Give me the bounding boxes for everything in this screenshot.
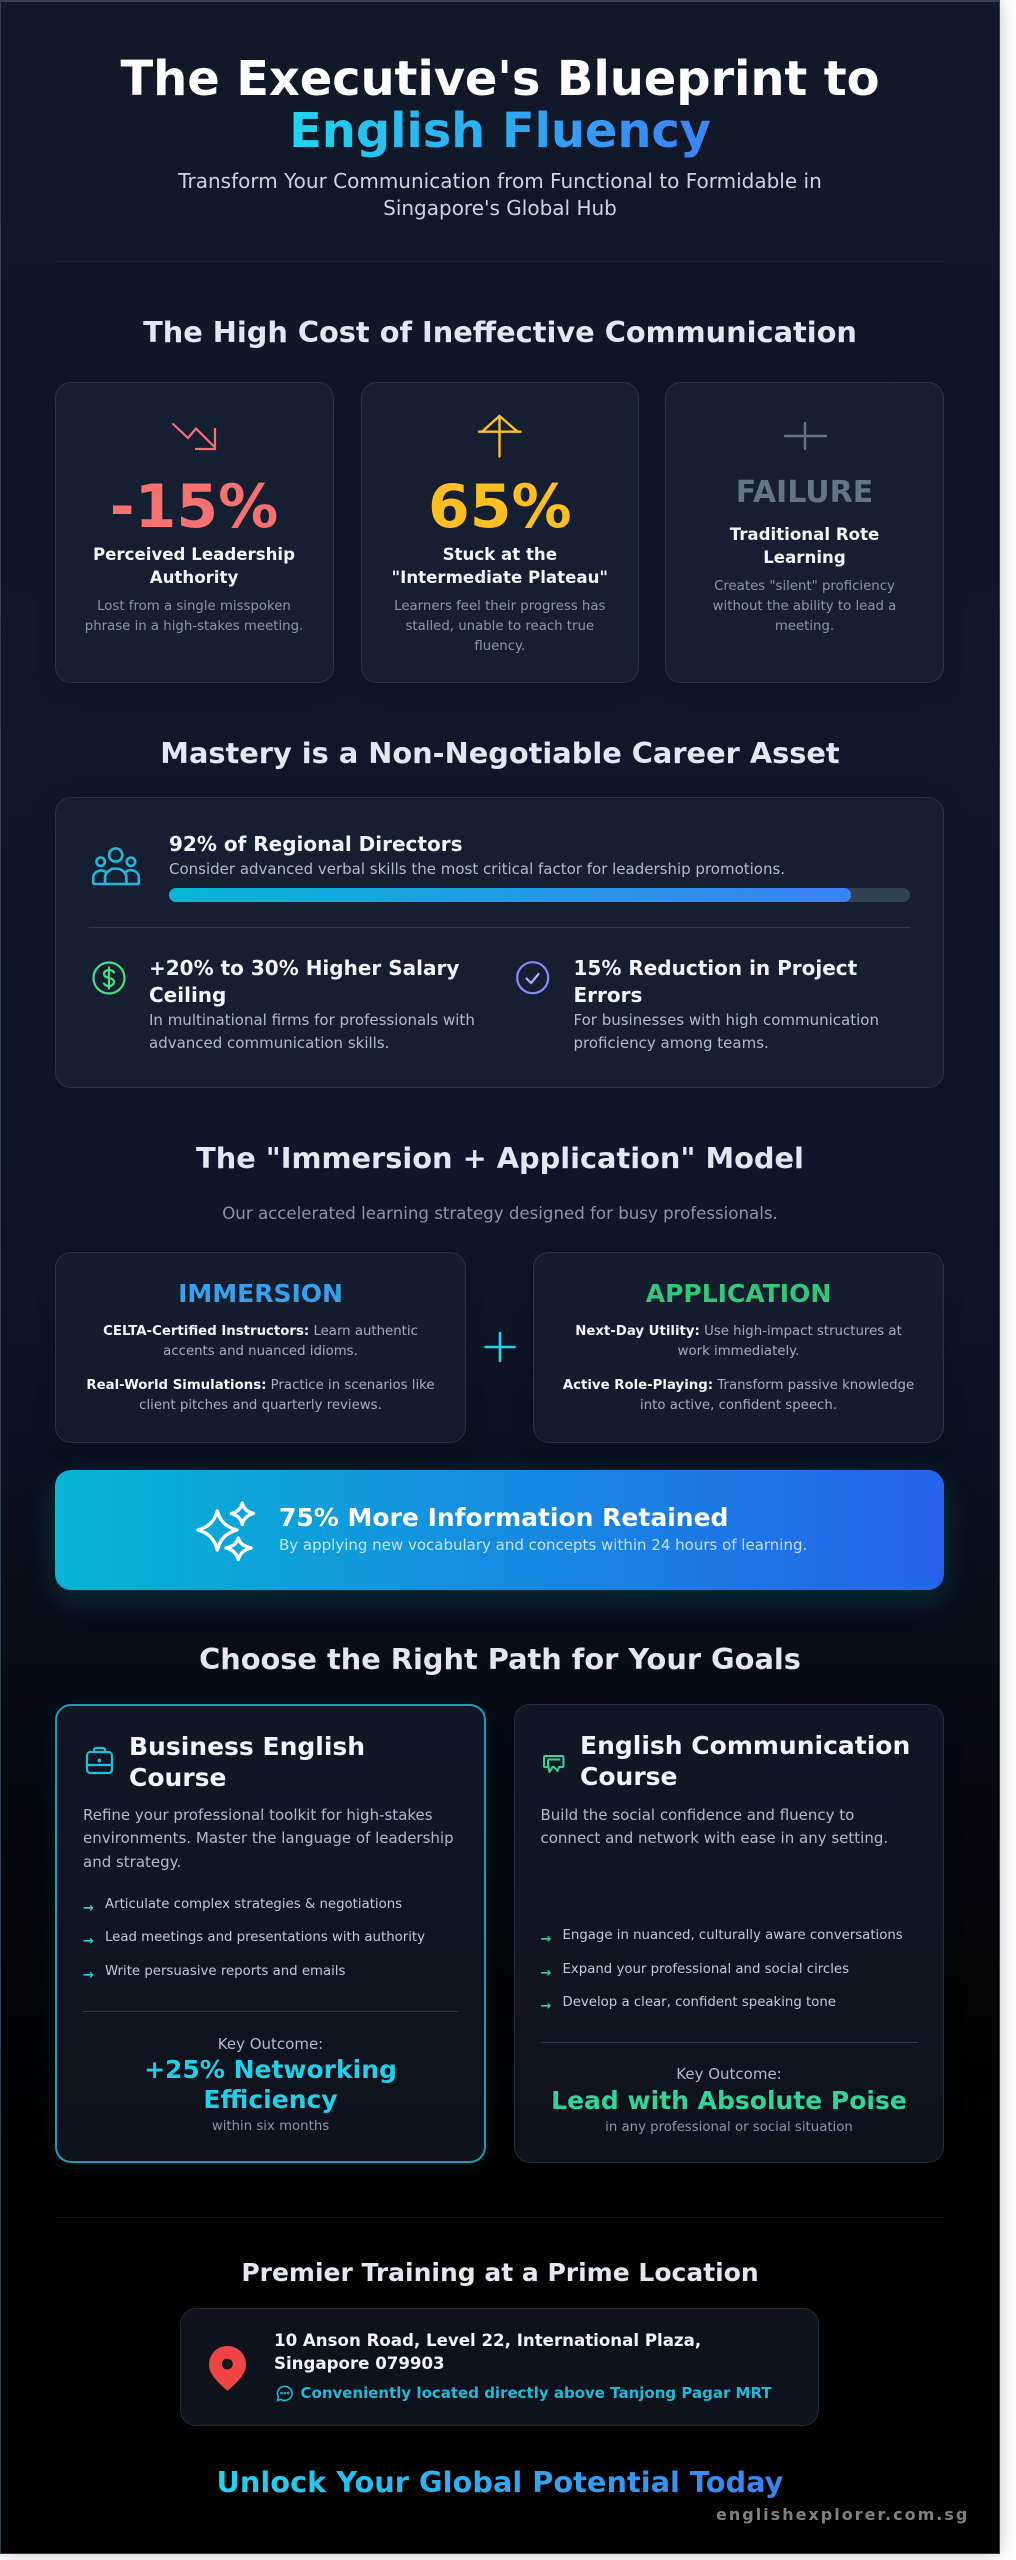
course title: English Communication: [580, 1730, 910, 1760]
stat description: Learners feel their progress has: [394, 599, 605, 614]
stat description: fluency.: [474, 639, 525, 654]
bullet list: [83, 1896, 425, 1982]
stat description: stalled, unable to reach true: [405, 619, 594, 634]
key outcome label: Key Outcome:: [676, 2065, 782, 2083]
icon: dollar: [92, 961, 126, 995]
course description: Refine your professional toolkit for high-stakes: [83, 1806, 433, 1824]
key outcome value: +25% Networking: [144, 2055, 397, 2084]
course title: [129, 1732, 365, 1792]
stat label: Stuck at the: [443, 545, 557, 564]
application text: into active, confident speech.: [640, 1398, 837, 1413]
icon: check circle: [516, 961, 550, 994]
benefit: errors: Errors: [574, 982, 642, 1006]
stat label: Traditional Rote: [730, 524, 879, 544]
benefit: salary: [149, 956, 475, 1052]
bullet 3: Write persuasive reports and emails: [105, 1964, 345, 1978]
stat value: 65%: [428, 472, 572, 542]
stat description: Lost from a single misspoken: [97, 599, 291, 614]
stat heading: 92% of Regional Directors: [169, 832, 462, 856]
bullet 1: Engage in nuanced, culturally aware conversations: [562, 1928, 903, 1943]
heading: choose path: Choose the Right Path for Your Goals: [199, 1642, 801, 1676]
stat label: "Intermediate Plateau": [392, 568, 608, 587]
immersion text: accents and nuanced idioms. Real-World Simulations: Practice in scenarios like: [86, 1344, 435, 1393]
model subtitle: Our accelerated learning strategy designed for busy professionals.: [222, 1204, 778, 1223]
address: [274, 2330, 701, 2373]
panel: business course: [55, 1704, 486, 2163]
panel: stat card failure: [665, 382, 944, 683]
key outcome label: Key Outcome:: [218, 2034, 323, 2052]
call to action: Unlock Your Global Potential Today: [217, 2465, 783, 2499]
stat description: Creates "silent" proficiency: [714, 579, 895, 594]
bullet 2: Lead meetings and presentations with authority: [105, 1930, 425, 1945]
application text: work immediately. Active Role-Playing: Transform passive knowledge: [563, 1344, 914, 1393]
icon: arrow up plateau: [478, 414, 522, 458]
benefit: errors: For businesses with high communication: [574, 1010, 879, 1028]
panel: application: [533, 1252, 944, 1443]
stat label: Perceived Leadership: [93, 545, 295, 564]
immersion text: client pitches and quarterly reviews.: [139, 1398, 382, 1413]
arrow 2: →: [83, 1934, 94, 1949]
stat description: [394, 599, 605, 654]
heading: high cost: The High Cost of Ineffective Communication: [143, 314, 857, 348]
icon: plus: [784, 422, 828, 450]
stat description: [713, 579, 896, 634]
banner text: By applying new vocabulary and concepts within 24 hours of learning.: [279, 1536, 807, 1554]
stat label: Authority: [150, 568, 238, 587]
arrow 2: →: [540, 1966, 551, 1980]
course description: and strategy.: [83, 1853, 181, 1871]
course description: [83, 1806, 454, 1871]
benefit: salary: advanced communication skills.: [149, 1034, 389, 1052]
stat label: [392, 545, 608, 587]
address: Singapore 079903: [274, 2354, 445, 2373]
stat description: phrase in a high-stakes meeting.: [85, 619, 303, 634]
benefit: errors: [574, 956, 879, 1052]
title: The Executive's Blueprint to: [121, 51, 879, 107]
application text: Next-Day Utility: Use high-impact structures at: [575, 1324, 902, 1339]
bullet 2: Expand your professional and social circles: [562, 1962, 849, 1976]
course title: Business English: [129, 1732, 365, 1760]
heading: location: Premier Training at a Prime Location: [241, 2258, 759, 2286]
transit note: Conveniently located directly above Tanjong Pagar MRT: [300, 2384, 772, 2402]
panel: immersion: [55, 1252, 466, 1443]
arrow 3: →: [540, 1999, 551, 2014]
icon: briefcase: [86, 1746, 114, 1774]
panel: location: [180, 2308, 819, 2426]
panel: stat card 65%: [361, 382, 639, 683]
course title: Course: [129, 1762, 226, 1792]
panel: stat card -15%: [55, 382, 334, 683]
panel: career asset: [55, 797, 944, 1088]
benefit: salary: Ceiling: [149, 982, 226, 1006]
bullet 3: Develop a clear, confident speaking tone: [562, 1995, 836, 2010]
icon: chat bubble: [276, 2386, 293, 2402]
stat description: without the ability to lead a: [713, 599, 896, 614]
progress bar 92%: [169, 888, 910, 902]
icon: chat: [543, 1755, 564, 1773]
icon: plus connector: [484, 1332, 516, 1362]
panel: communication course: [514, 1704, 944, 2163]
course description: connect and network with ease in any setting.: [540, 1829, 888, 1847]
subtitle: Singapore's Global Hub: [383, 196, 617, 220]
key outcome value: Efficiency: [203, 2085, 338, 2114]
website watermark: englishexplorer.com.sg: [716, 2505, 969, 2524]
benefit: salary: In multinational firms for professionals with: [149, 1010, 475, 1028]
bullet 1: Articulate complex strategies & negotiations: [105, 1896, 402, 1912]
bullet list: [540, 1928, 903, 2014]
stat description: meeting.: [775, 619, 834, 634]
banner: retention: [55, 1470, 944, 1590]
heading: mastery: Mastery is a Non-Negotiable Career Asset: [160, 736, 840, 770]
stat label: [93, 545, 295, 587]
arrow 3: →: [83, 1968, 94, 1982]
course description: [540, 1806, 888, 1847]
key outcome value: [144, 2055, 397, 2114]
banner heading: 75% More Information Retained: [279, 1502, 728, 1532]
heading: model: The "Immersion + Application" Model: [196, 1141, 804, 1175]
icon: users: [92, 847, 140, 886]
course title: Course: [580, 1762, 678, 1790]
benefit: errors: proficiency among teams.: [574, 1034, 769, 1052]
course description: Build the social confidence and fluency to: [540, 1806, 854, 1824]
key outcome value: Lead with Absolute Poise: [551, 2086, 907, 2115]
stat label: [730, 524, 879, 567]
key outcome note: in any professional or social situation: [605, 2120, 853, 2134]
subtitle: Transform Your Communication from Functional to Formidable in: [178, 169, 822, 193]
icon: trending down: [172, 422, 216, 450]
course title: [580, 1730, 910, 1790]
course description: environments. Master the language of leadership: [83, 1829, 454, 1847]
title: [120, 51, 879, 159]
benefit: salary: +20% to 30% Higher Salary: [149, 956, 459, 980]
title: English Fluency: [289, 103, 711, 159]
stat description: [85, 599, 303, 634]
icon: sparkles: [196, 1501, 256, 1562]
stat label: Learning: [763, 548, 846, 567]
immersion heading: IMMERSION: [178, 1279, 343, 1308]
arrow 1: →: [83, 1900, 94, 1916]
subtitle: [178, 169, 822, 220]
immersion text: CELTA-Certified Instructors: Learn authentic: [103, 1324, 418, 1339]
application text: [563, 1324, 914, 1413]
immersion text: [86, 1324, 435, 1413]
application heading: APPLICATION: [646, 1279, 831, 1308]
address: 10 Anson Road, Level 22, International Plaza,: [274, 2330, 701, 2350]
icon: map pin: [209, 2346, 246, 2391]
stat text: Consider advanced verbal skills the most critical factor for leadership promotions.: [169, 860, 785, 878]
stat value: -15%: [110, 472, 278, 542]
benefit: errors: 15% Reduction in Project: [574, 956, 857, 980]
stat value: FAILURE: [736, 475, 873, 510]
key outcome note: within six months: [212, 2118, 329, 2134]
arrow 1: →: [540, 1932, 551, 1947]
